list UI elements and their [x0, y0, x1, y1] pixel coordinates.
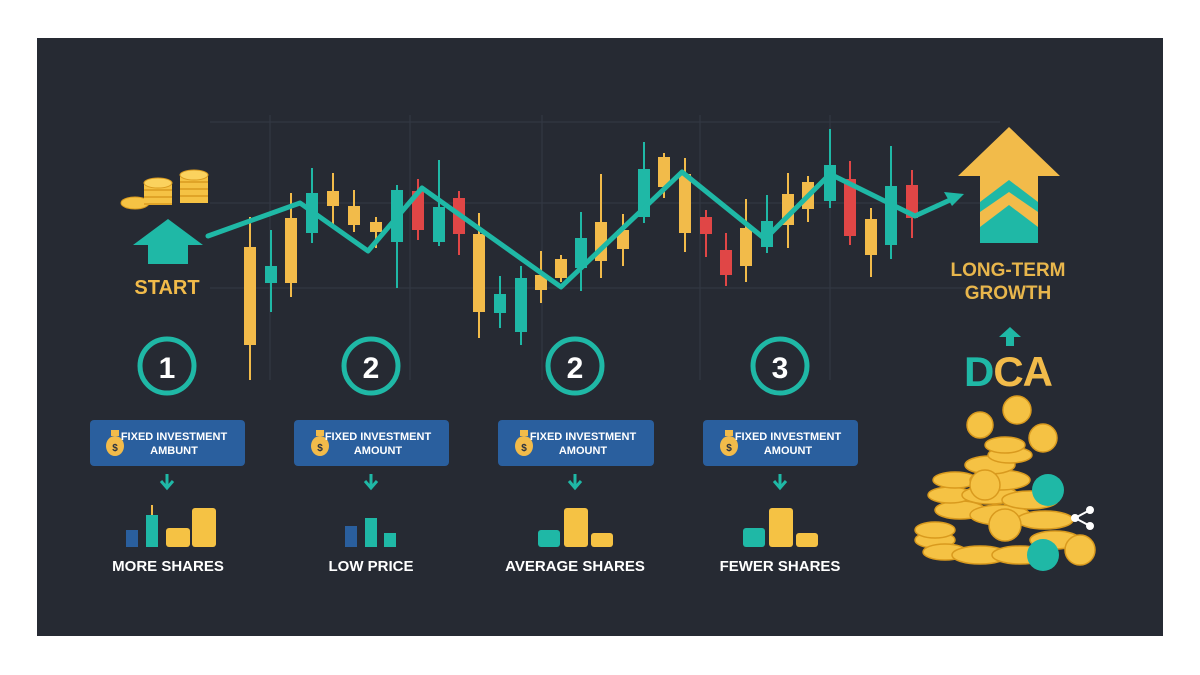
icon: coin pile: [915, 396, 1095, 571]
step 2: $: [317, 443, 323, 454]
growth label: [950, 260, 1066, 304]
step 4: [703, 339, 858, 575]
step 2: LOW PRICE: [328, 558, 414, 575]
icon: start coins: [121, 170, 208, 209]
step 3: $: [521, 443, 527, 454]
DCA logo: DCA: [964, 348, 1053, 395]
step 4: AMOUNT: [764, 445, 812, 457]
step 4: 3: [772, 352, 788, 385]
step 2: FIXED INVESTMENT: [325, 431, 431, 443]
step 4: FEWER SHARES: [720, 558, 840, 575]
step 3: [498, 339, 654, 575]
growth label: GROWTH: [965, 283, 1051, 304]
step 1: FIXED INVESTMENT: [121, 431, 227, 443]
step 1: AMBUNT: [150, 445, 198, 457]
step 1: 1: [159, 352, 175, 385]
icon: start arrow: [133, 219, 203, 264]
growth label: LONG-TERM: [950, 260, 1066, 281]
step 3: AVERAGE SHARES: [505, 558, 645, 575]
trend line: [208, 172, 950, 287]
step 4: FIXED INVESTMENT: [735, 431, 841, 443]
step 2: AMOUNT: [354, 445, 402, 457]
step 2: 2: [363, 352, 379, 385]
step 1: $: [112, 443, 118, 454]
step 2: [294, 339, 449, 575]
step 1: MORE SHARES: [112, 558, 224, 575]
step 3: 2: [567, 352, 583, 385]
icon: small up arrow: [999, 327, 1021, 346]
step 1: [90, 339, 245, 575]
candlestick chart: [208, 129, 964, 380]
icon: growth arrow: [958, 127, 1060, 243]
step 3: FIXED INVESTMENT: [530, 431, 636, 443]
step 4: $: [726, 443, 732, 454]
step 3: AMOUNT: [559, 445, 607, 457]
start label: START: [134, 277, 200, 299]
